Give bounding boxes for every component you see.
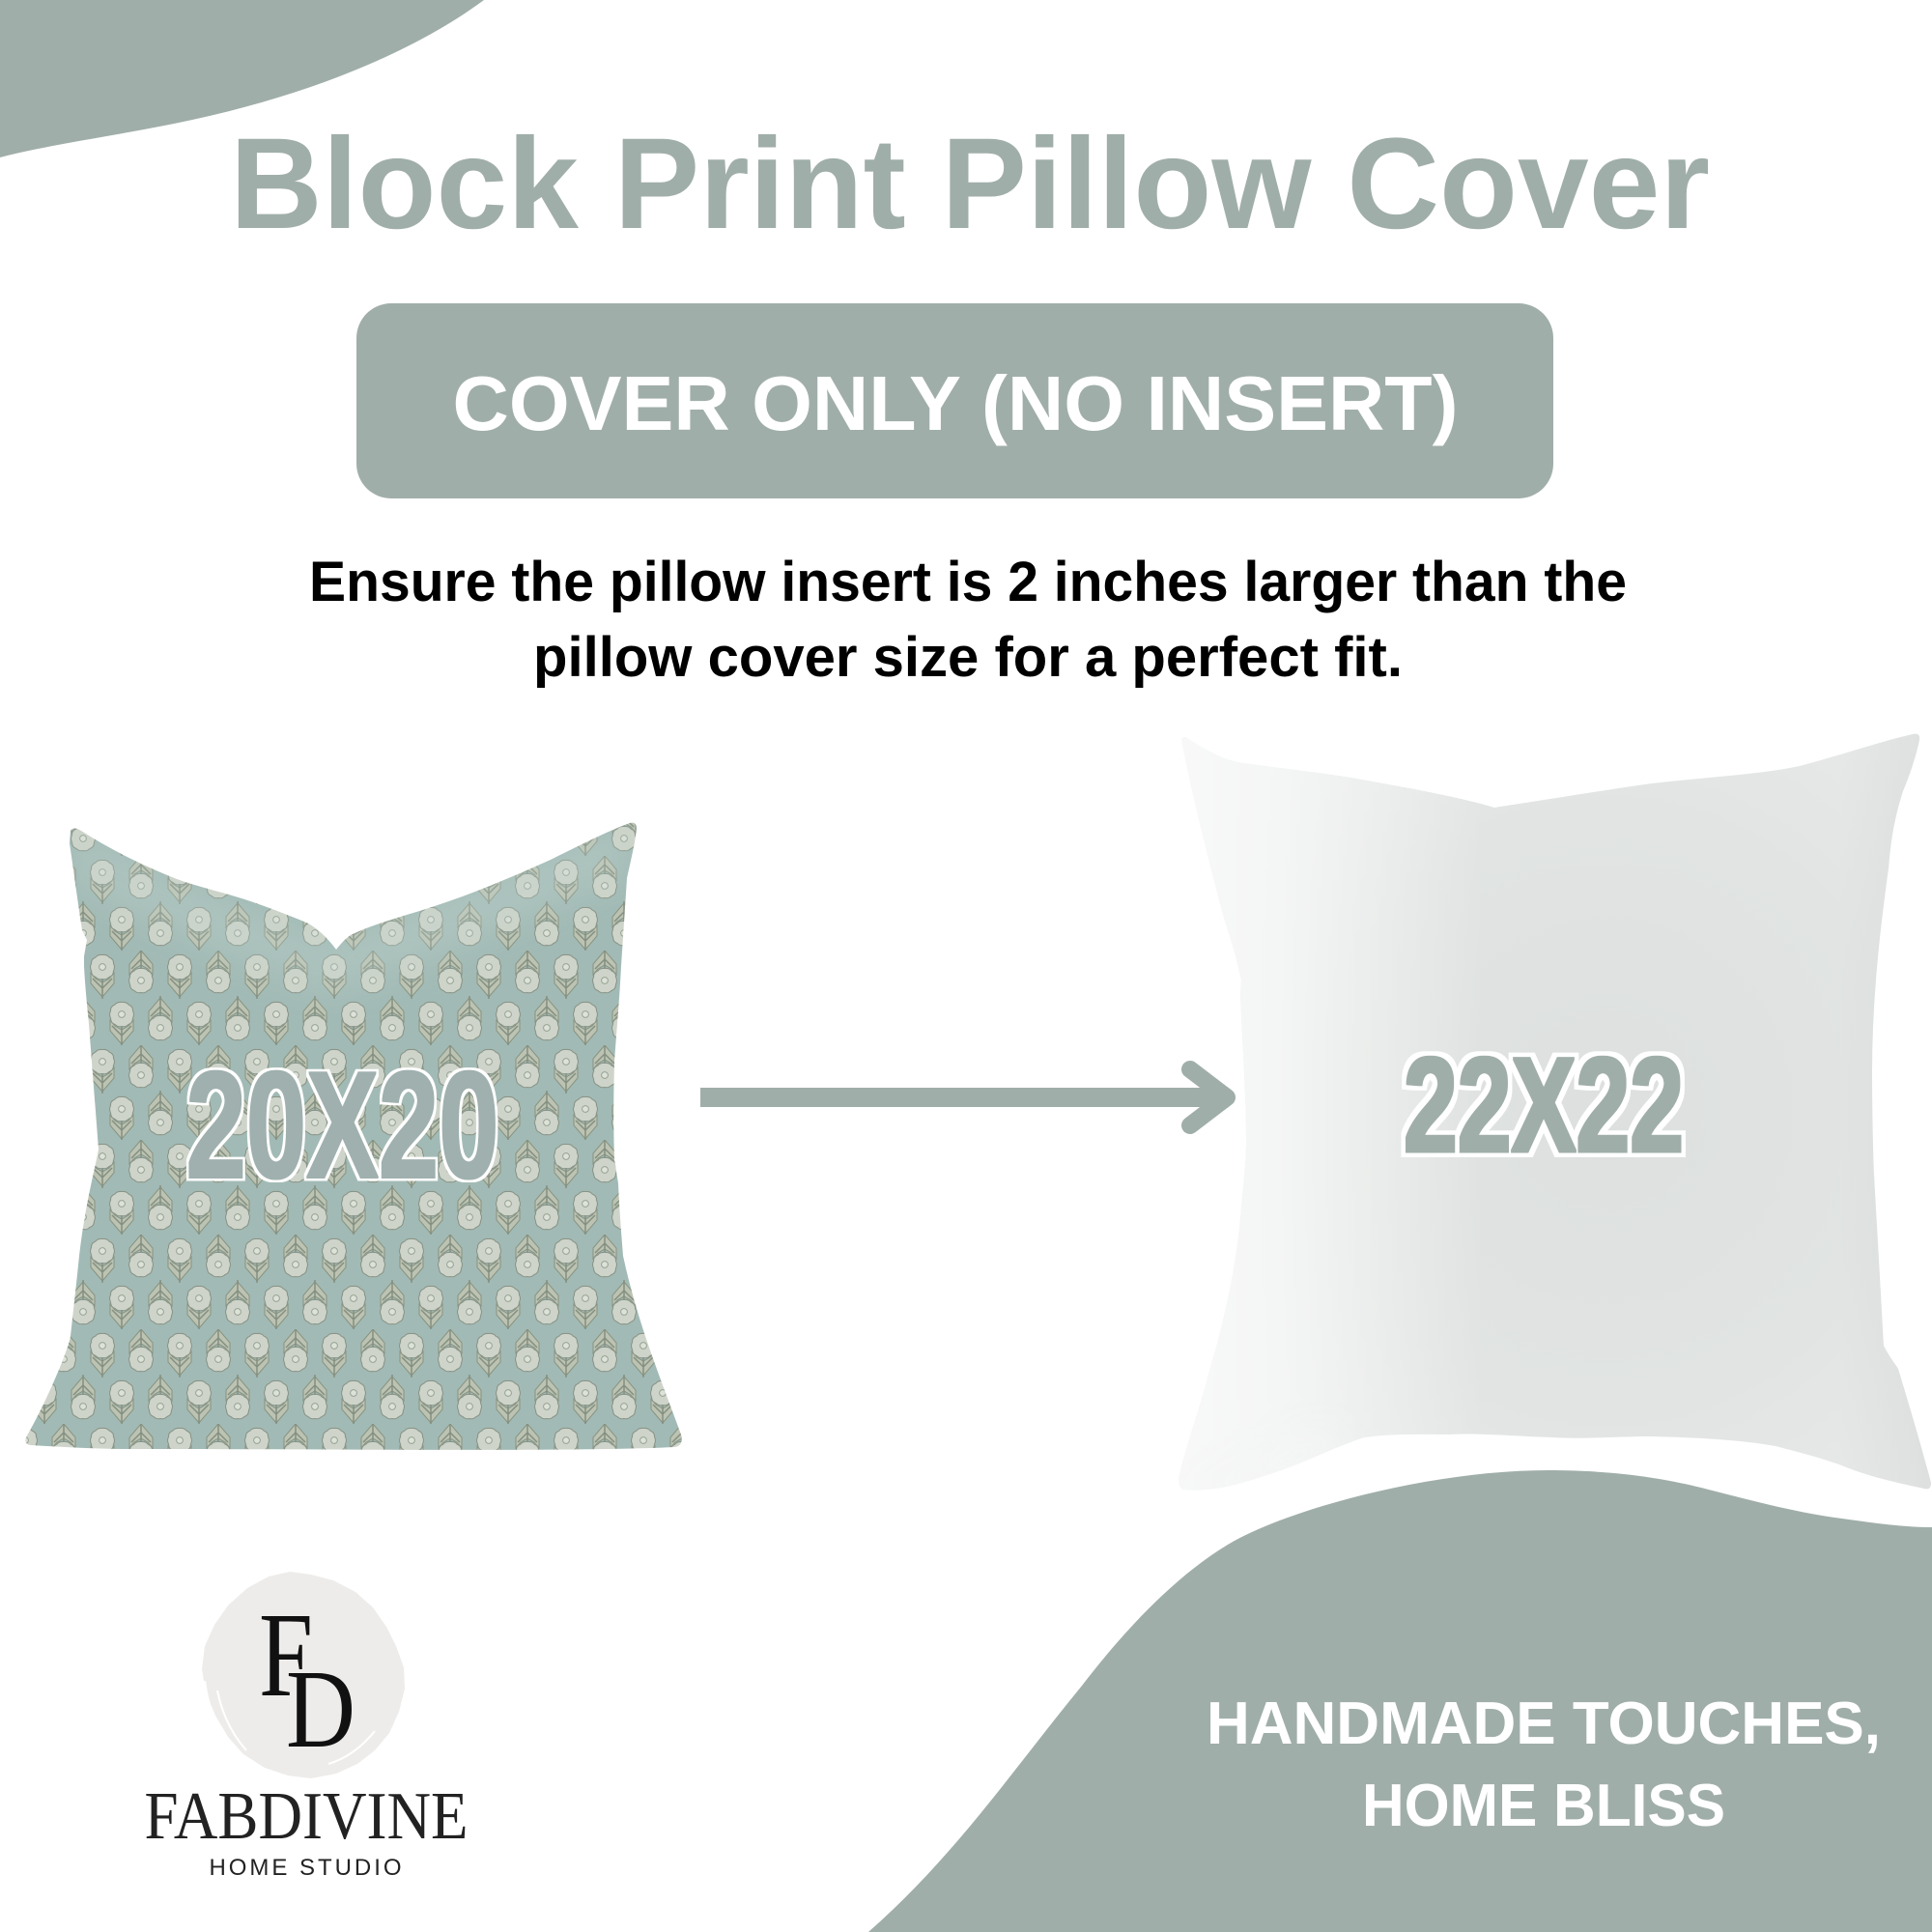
instruction text (309, 551, 1627, 689)
decorative wave panel: bottom right (868, 1470, 1932, 1932)
tagline (1207, 1690, 1881, 1839)
banner: cover only (356, 303, 1553, 498)
tagline: HOME BLISS (1362, 1773, 1725, 1839)
logo wordmark: FABDIVINE (145, 1779, 468, 1854)
logo brush circle (202, 1572, 405, 1778)
logo monogram (259, 1589, 355, 1771)
size label: 20x20: 20X20 (185, 1040, 498, 1210)
logo: Fabdivine Home Studio (145, 1572, 468, 1881)
logo monogram: D (286, 1648, 355, 1771)
logo subtitle: HOME STUDIO (209, 1855, 402, 1881)
logo monogram: F (259, 1589, 313, 1722)
pillow: plain insert 22x22 (1159, 715, 1932, 1507)
arrow (700, 1069, 1227, 1125)
banner text: COVER ONLY (NO INSERT) (452, 360, 1459, 446)
decorative corner shape: top left (0, 0, 484, 157)
size label: 22x22: 22X22 (1404, 1029, 1684, 1180)
pillow: block print cover 20x20 (0, 811, 696, 1459)
instruction text: pillow cover size for a perfect fit. (533, 626, 1403, 689)
tagline: HANDMADE TOUCHES, (1207, 1690, 1881, 1757)
instruction text: Ensure the pillow insert is 2 inches larger than the (309, 551, 1627, 613)
title: Block Print Pillow Cover (230, 112, 1710, 256)
